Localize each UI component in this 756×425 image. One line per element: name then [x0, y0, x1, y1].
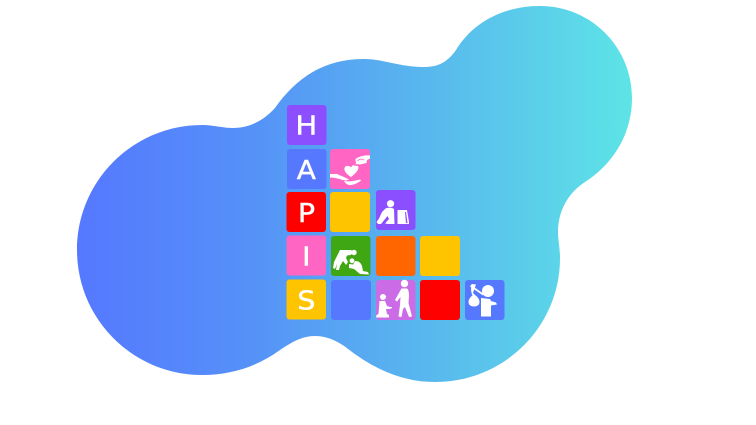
icon: person helping fallen person	[333, 250, 369, 274]
icon: heart passed between hands	[330, 155, 370, 185]
icon: person carrying bindle	[468, 284, 497, 316]
icon: seated person beside box	[376, 200, 409, 224]
tile: yellow	[420, 236, 460, 276]
tile: pink with giving heart icon	[330, 149, 370, 189]
tile: orange	[376, 236, 416, 276]
tile: H: H	[295, 112, 317, 141]
background blob	[77, 6, 632, 382]
tile: I: I	[302, 243, 311, 272]
tile: I	[286, 236, 326, 276]
tile: blue with bindle traveller icon	[465, 280, 504, 320]
tile: P	[286, 192, 326, 232]
tile: blue	[331, 280, 371, 320]
tile: A	[287, 149, 326, 189]
tile: yellow	[330, 192, 370, 232]
tile: A: A	[297, 156, 317, 185]
icon: person walking past kneeling person	[376, 280, 412, 318]
tile: violet with two figures icon	[376, 280, 416, 320]
tile: S: S	[297, 287, 315, 316]
tile: P: P	[298, 199, 315, 228]
tile: purple with seated person icon	[376, 190, 416, 230]
tile: green with helping person icon	[331, 236, 370, 276]
tile: H	[287, 105, 326, 145]
tile: S	[286, 280, 326, 320]
tile: red	[420, 280, 460, 320]
